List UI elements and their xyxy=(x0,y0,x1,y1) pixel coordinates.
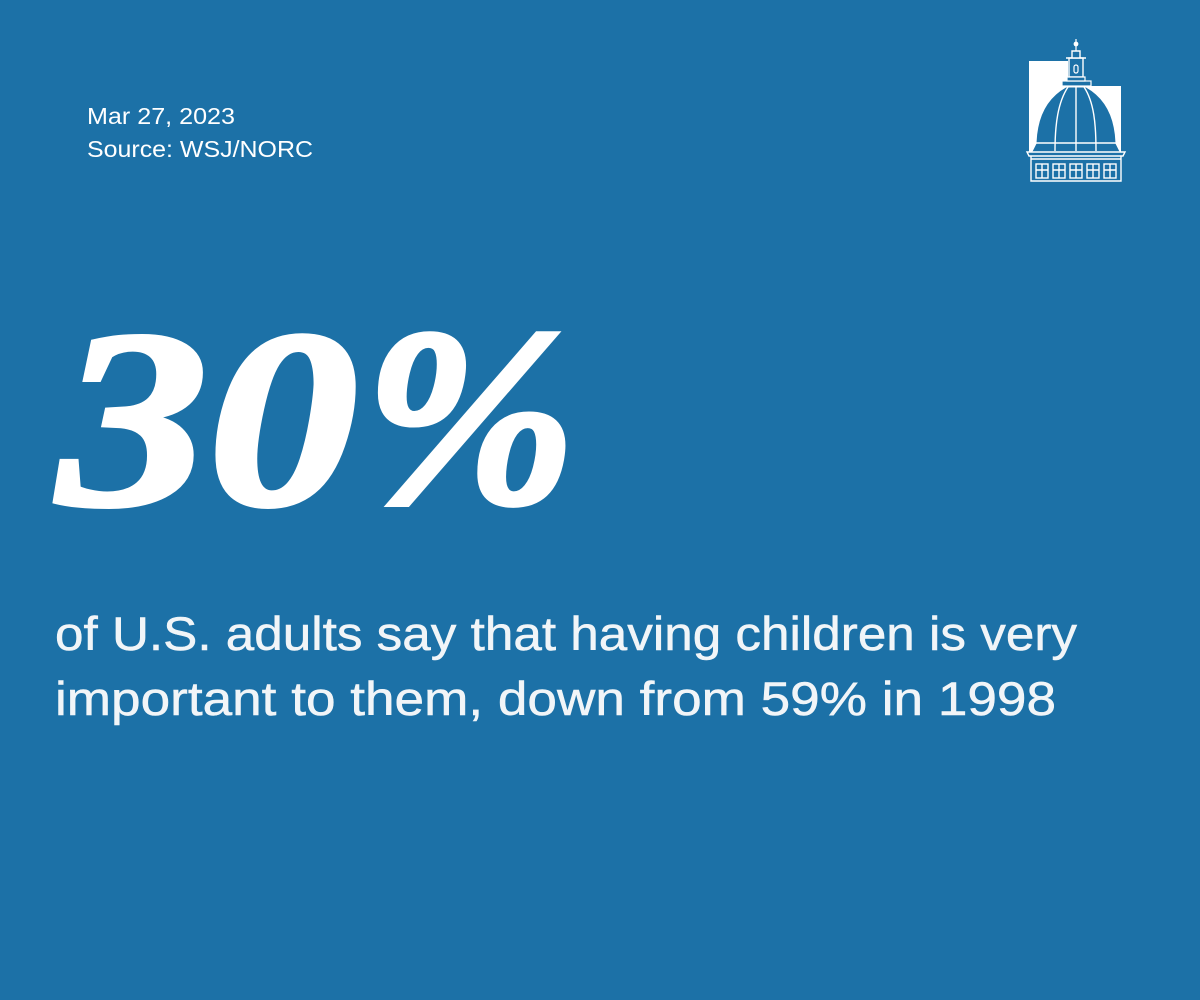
statistic description xyxy=(55,607,1078,725)
source text block xyxy=(87,103,313,162)
big statistic: 30% xyxy=(56,277,576,559)
icon: capitol dome logo xyxy=(1027,39,1125,182)
statistic description: important to them, down from 59% in 1998 xyxy=(55,672,1056,725)
statistic description: of U.S. adults say that having children is very xyxy=(55,607,1078,660)
source text block: Mar 27, 2023 xyxy=(87,103,235,129)
source text block: Source: WSJ/NORC xyxy=(87,136,313,162)
big statistic: 30%: 30 xyxy=(56,279,358,559)
big statistic: 30%: % xyxy=(364,277,576,557)
